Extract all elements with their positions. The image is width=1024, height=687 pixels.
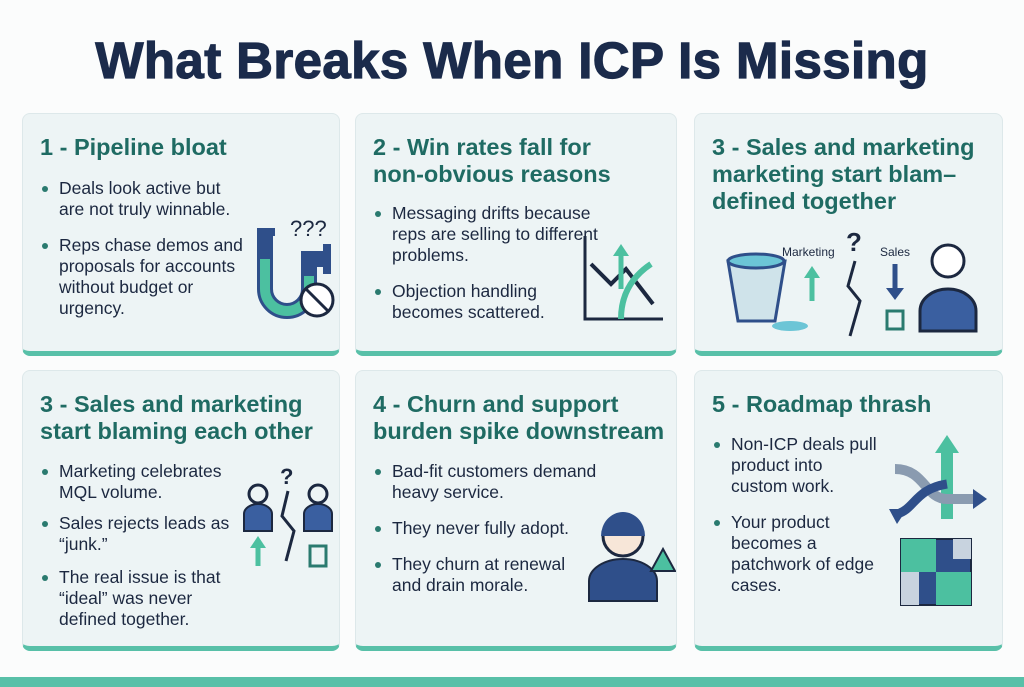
heading: 4 - Churn and support bbox=[373, 391, 618, 417]
bullets: Non-ICP deals pull product into custom work. bbox=[731, 434, 877, 496]
bullets bbox=[375, 461, 596, 595]
panel: win rates bbox=[355, 113, 677, 356]
heading: marketing start blam– bbox=[712, 161, 956, 187]
bullets: They never fully adopt. bbox=[392, 518, 569, 538]
bullets: They churn at renewal and drain morale. bbox=[392, 554, 565, 595]
panel: churn bbox=[355, 370, 677, 651]
heading: start blaming each other bbox=[40, 418, 313, 444]
heading bbox=[40, 391, 313, 444]
icon: pipe: ??? bbox=[290, 216, 327, 241]
title: What Breaks When ICP Is Missing bbox=[95, 32, 929, 89]
icon: arrows and puzzle bbox=[889, 435, 987, 606]
panel: roadmap thrash bbox=[694, 370, 1003, 651]
heading: 3 - Sales and marketing bbox=[40, 391, 303, 417]
icon: two people bbox=[243, 466, 333, 568]
icon: bucket and person: ? bbox=[846, 227, 862, 257]
bullets: Deals look active but are not truly winnable. bbox=[59, 178, 230, 219]
heading bbox=[373, 391, 664, 444]
bullets: Messaging drifts because reps are selling to different problems. bbox=[392, 203, 598, 265]
icon: pipe bbox=[257, 216, 334, 319]
heading: 5 - Roadmap thrash bbox=[712, 391, 931, 417]
bullets bbox=[42, 461, 229, 629]
heading: non-obvious reasons bbox=[373, 161, 611, 187]
panel: pipeline bloat bbox=[22, 113, 340, 356]
heading bbox=[373, 134, 611, 187]
panel: sales and marketing top right bbox=[694, 113, 1003, 356]
heading: 2 - Win rates fall for bbox=[373, 134, 591, 160]
heading: defined together bbox=[712, 188, 896, 214]
heading: 1 - Pipeline bloat bbox=[40, 134, 227, 160]
icon: bucket and person: Marketing bbox=[782, 245, 835, 259]
heading bbox=[712, 134, 975, 214]
icon: bucket and person: Sales bbox=[880, 245, 910, 259]
bullets: Marketing celebrates MQL volume. bbox=[59, 461, 221, 502]
icon: bucket and person bbox=[726, 227, 978, 336]
heading: burden spike downstream bbox=[373, 418, 664, 444]
panel: blaming each other bbox=[22, 370, 340, 651]
icon: falling chart bbox=[584, 236, 663, 320]
bullets: Bad-fit customers demand heavy service. bbox=[392, 461, 596, 502]
bullets: Objection handling becomes scattered. bbox=[392, 281, 545, 322]
bullets: Your product becomes a patchwork of edge cases. bbox=[731, 512, 874, 595]
bullets: Reps chase demos and proposals for accounts without budget or urgency. bbox=[59, 235, 243, 318]
bullets bbox=[375, 203, 598, 322]
bullets bbox=[42, 178, 243, 318]
bullets: The real issue is that “ideal” was never defined together. bbox=[59, 567, 220, 629]
icon: stressed support agent bbox=[588, 512, 676, 602]
heading: 3 - Sales and marketing bbox=[712, 134, 975, 160]
bullets: Sales rejects leads as “junk.” bbox=[59, 513, 229, 554]
bullets bbox=[714, 434, 877, 595]
